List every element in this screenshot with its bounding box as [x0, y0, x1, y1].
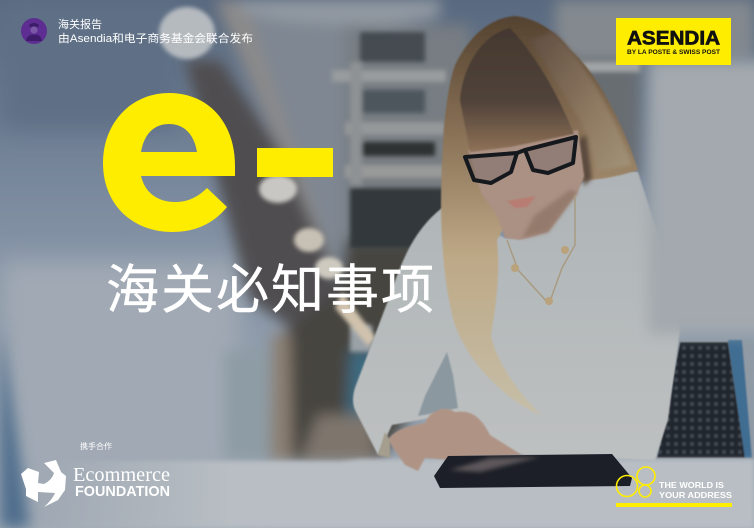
- desk: [50, 459, 754, 528]
- header text: [58, 17, 253, 45]
- tagline logo: YOUR ADDRESS: [659, 491, 733, 500]
- title: large yellow e-: [103, 93, 333, 232]
- right hair sheen: [530, 32, 632, 172]
- logo: Asendia: ASENDIA: [627, 28, 720, 50]
- gap between arm and torso: [418, 352, 458, 416]
- necklace: [507, 195, 575, 304]
- bangs: [460, 28, 574, 152]
- logo: Ecommerce Foundation: Ecommerce: [73, 464, 170, 486]
- logo: Asendia: [616, 18, 731, 65]
- tablet: [434, 454, 632, 488]
- hand: [388, 409, 522, 471]
- header text: 由Asendia和电子商务基金会联合发布: [58, 31, 253, 45]
- title: Chinese subtitle: 海关必知事项: [106, 261, 436, 320]
- header icon: customs officer: [21, 18, 47, 44]
- foreground blurred column: [648, 60, 754, 334]
- tagline logo: THE WORLD IS: [659, 481, 725, 490]
- logo: Asendia: BY LA POSTE & SWISS POST: [627, 49, 720, 56]
- header text: 海关报告: [58, 17, 102, 31]
- partner label: 携手合作: [80, 441, 112, 451]
- logo: Ecommerce Foundation: FOUNDATION: [75, 483, 170, 500]
- cuff: [378, 432, 390, 458]
- face and neck: [468, 130, 584, 240]
- neck shadow: [522, 190, 578, 238]
- logo: Ecommerce Foundation: [21, 460, 170, 507]
- long hair: [441, 16, 638, 415]
- glasses: [465, 137, 576, 183]
- lips: [507, 196, 536, 208]
- chair: [655, 340, 754, 460]
- sweater: [353, 171, 680, 460]
- tagline logo: [616, 467, 733, 507]
- dark hair behind ear: [578, 135, 592, 186]
